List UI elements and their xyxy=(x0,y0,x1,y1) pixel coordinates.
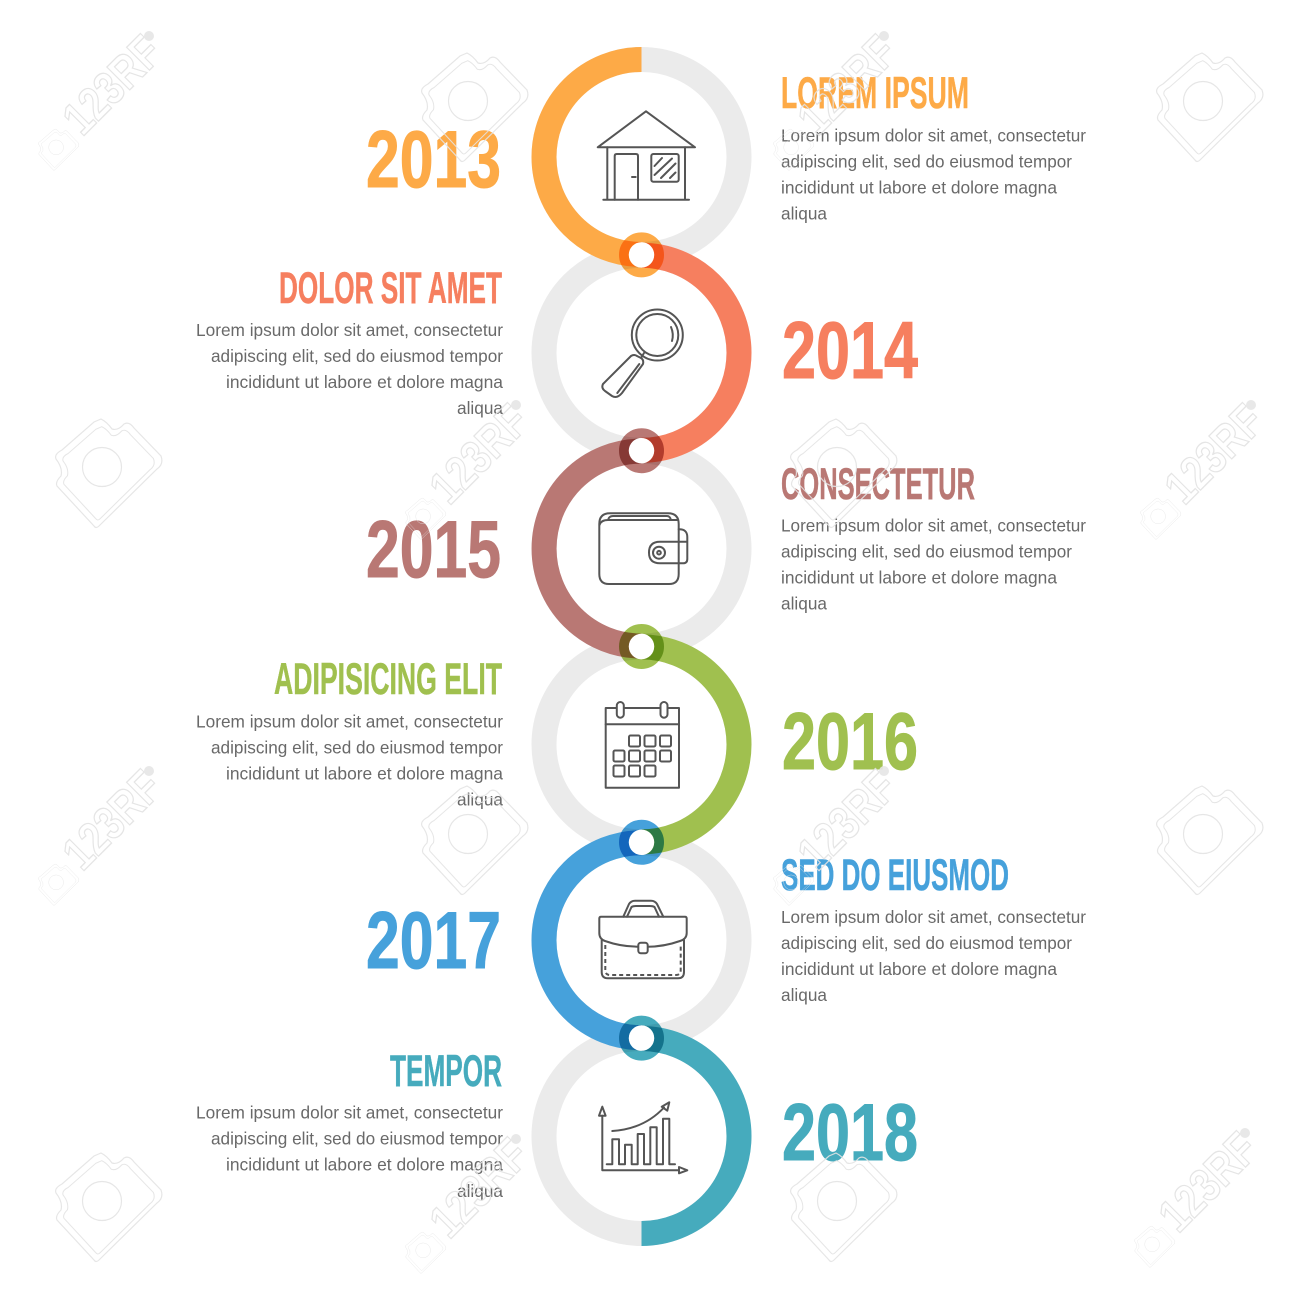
heading: Sed Do Eiusmod: SED DO EIUSMOD xyxy=(781,851,1009,900)
watermark: 123RF row 4 col 4 xyxy=(1134,1122,1267,1267)
arc 2015 rust xyxy=(544,451,642,646)
text block 2016: incididunt ut labore et dolore magna xyxy=(226,764,503,784)
watermark: egg row 1 col 4 xyxy=(1157,53,1263,162)
text block 2014 xyxy=(196,320,503,418)
watermark: 123RF row 1 col 3 xyxy=(773,25,906,170)
connector ring 3 xyxy=(624,629,659,664)
watermark: 123RF top left: 123RF xyxy=(52,25,171,144)
text block 2015: Lorem ipsum dolor sit amet, consectetur xyxy=(781,516,1086,536)
watermark: egg row 3 col 2 xyxy=(422,786,528,894)
text block 2017: incididunt ut labore et dolore magna xyxy=(781,959,1057,979)
watermark: 123RF top left xyxy=(38,25,171,170)
text block 2013 xyxy=(781,126,1086,224)
watermark: egg row 2 col 3 xyxy=(791,419,897,528)
watermark: 123RF row 4 col 2: 123RF xyxy=(419,1128,538,1247)
text block 2017: Lorem ipsum dolor sit amet, consectetur xyxy=(781,907,1086,927)
text block 2017: aliqua xyxy=(781,985,827,1005)
year 2013: 2013 xyxy=(366,115,501,205)
text block 2018 xyxy=(196,1102,503,1201)
text block 2013: incididunt ut labore et dolore magna xyxy=(781,178,1057,198)
watermark: 123RF row 3 col 3: 123RF xyxy=(787,760,906,879)
watermark: egg row 3 col 4 xyxy=(1157,786,1263,894)
icon: briefcase xyxy=(599,901,687,978)
watermark: 123RF row 3 col 1 xyxy=(38,760,171,905)
text block 2015 xyxy=(781,516,1086,614)
icon: house xyxy=(598,111,695,200)
icon: calendar xyxy=(606,702,679,788)
text block 2016: adipiscing elit, sed do eiusmod tempor xyxy=(211,738,503,758)
icon: wallet xyxy=(599,513,687,584)
icon: magnifying glass xyxy=(602,310,683,397)
heading: Adipisicing Elit: ADIPISICING ELIT xyxy=(274,655,502,704)
arc 2016 green xyxy=(642,647,739,842)
watermark: egg row 2 col 1 xyxy=(56,419,162,528)
watermark: 123RF row 2 col 2: 123RF xyxy=(419,394,538,513)
heading: Lorem Ipsum: LOREM IPSUM xyxy=(781,69,969,118)
year 2015: 2015 xyxy=(366,505,501,595)
year 2018: 2018 xyxy=(782,1088,918,1178)
connector ring 5 xyxy=(624,1020,659,1056)
text block 2018: incididunt ut labore et dolore magna xyxy=(226,1154,503,1174)
text block 2018: aliqua xyxy=(457,1181,503,1201)
text block 2016: aliqua xyxy=(457,790,503,810)
text block 2014: aliqua xyxy=(457,398,503,418)
text block 2015: adipiscing elit, sed do eiusmod tempor xyxy=(781,542,1072,562)
text block 2016 xyxy=(196,712,503,810)
watermark: 123RF row 2 col 2 xyxy=(405,394,538,539)
text block 2014: adipiscing elit, sed do eiusmod tempor xyxy=(211,346,503,366)
heading: Tempor: TEMPOR xyxy=(390,1047,502,1096)
connector ring 4 xyxy=(624,825,659,860)
watermark: 123RF row 3 col 1: 123RF xyxy=(52,760,171,879)
text block 2018: Lorem ipsum dolor sit amet, consectetur xyxy=(196,1102,503,1122)
text block 2013: aliqua xyxy=(781,204,827,224)
watermark: egg row 4 col 3 xyxy=(791,1153,897,1262)
year 2014: 2014 xyxy=(782,306,918,396)
text block 2014: Lorem ipsum dolor sit amet, consectetur xyxy=(196,320,503,340)
connector ring 1 xyxy=(624,237,659,272)
icon: growth chart xyxy=(599,1102,687,1173)
watermark: egg row 1 col 2 xyxy=(422,53,528,162)
gray base circles xyxy=(544,60,739,1234)
arc 2013 orange xyxy=(544,60,642,254)
watermark: 123RF row 3 col 3 xyxy=(773,760,906,905)
text block 2017 xyxy=(781,907,1086,1005)
year 2017: 2017 xyxy=(366,896,501,986)
arc 2017 blue xyxy=(544,843,642,1038)
watermark: 123RF row 4 col 4: 123RF xyxy=(1148,1122,1267,1241)
text block 2013: adipiscing elit, sed do eiusmod tempor xyxy=(781,152,1072,172)
year 2016: 2016 xyxy=(782,697,918,787)
connector ring 2 xyxy=(624,433,659,468)
arc 2014 coral xyxy=(642,255,739,450)
watermark: 123RF row 1 col 3: 123RF xyxy=(787,25,906,144)
text block 2015: incididunt ut labore et dolore magna xyxy=(781,568,1057,588)
text block 2018: adipiscing elit, sed do eiusmod tempor xyxy=(211,1128,503,1148)
text block 2016: Lorem ipsum dolor sit amet, consectetur xyxy=(196,712,503,732)
watermark: 123RF row 4 col 2 xyxy=(405,1128,538,1273)
watermark: 123RF row 2 col 4 xyxy=(1140,394,1273,539)
text block 2013: Lorem ipsum dolor sit amet, consectetur xyxy=(781,126,1086,146)
heading: Dolor Sit Amet: DOLOR SIT AMET xyxy=(279,264,502,313)
text block 2017: adipiscing elit, sed do eiusmod tempor xyxy=(781,933,1072,953)
arc 2018 teal xyxy=(642,1038,739,1234)
text block 2014: incididunt ut labore et dolore magna xyxy=(226,372,503,392)
watermark: egg row 4 col 1 xyxy=(56,1153,162,1262)
text block 2015: aliqua xyxy=(781,594,827,614)
heading: Consectetur: CONSECTETUR xyxy=(781,460,975,509)
watermark: 123RF row 2 col 4: 123RF xyxy=(1154,394,1273,513)
